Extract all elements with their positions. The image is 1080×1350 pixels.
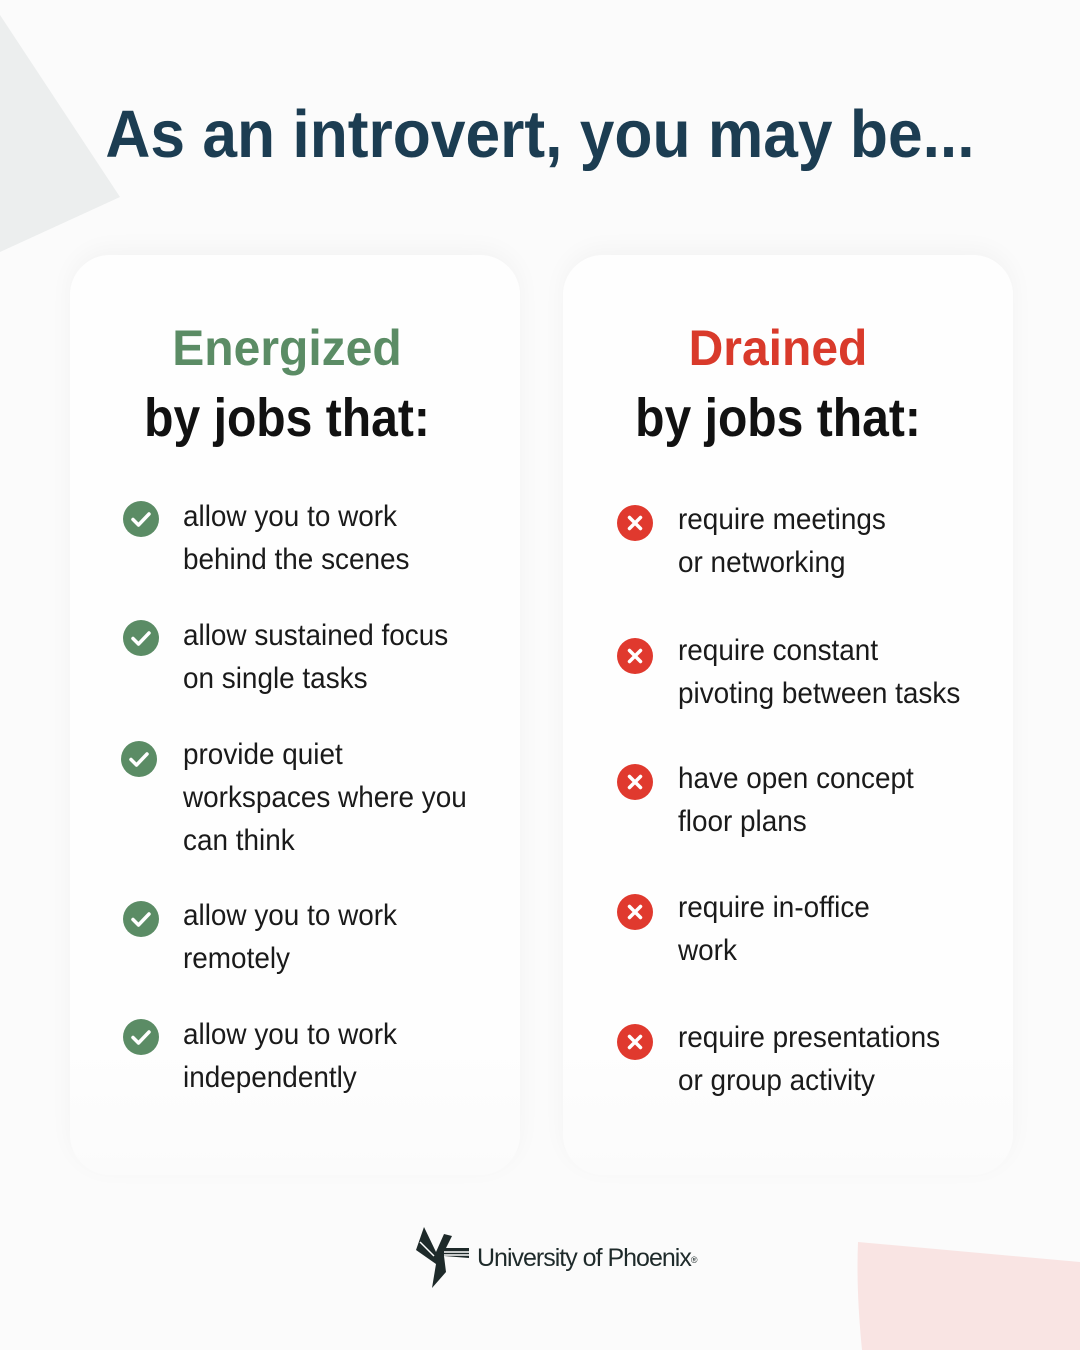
icon: check (123, 901, 159, 937)
heading: by jobs that: by jobs that: (144, 388, 430, 448)
list: energized items: on single tasks (183, 662, 368, 695)
list: energized items: independently (183, 1061, 357, 1094)
list: energized items: allow sustained focus (183, 619, 448, 652)
logo: University of Phoenix (416, 1227, 698, 1288)
heading: energized: Energized (172, 320, 402, 376)
list: energized items: behind the scenes (183, 543, 409, 576)
list: energized items: remotely (183, 942, 290, 975)
icon: x (617, 1024, 653, 1060)
icon: x (617, 894, 653, 930)
list: energized items: workspaces where you (183, 781, 467, 814)
list: drained items: have open concept (678, 762, 914, 795)
icon: phoenix (416, 1227, 469, 1288)
list: drained items (617, 503, 960, 1097)
list: drained items: or group activity (678, 1064, 875, 1097)
list: energized items: allow you to work (183, 899, 397, 932)
list: drained items: require constant (678, 634, 878, 667)
list: drained items: or networking (678, 546, 845, 579)
list: energized items: can think (183, 824, 295, 857)
list: energized items (121, 500, 467, 1094)
list: drained items: work (678, 934, 737, 967)
title: As an introvert, you may be... (105, 97, 975, 172)
icon: check (123, 1019, 159, 1055)
heading: by jobs that: by jobs that: (635, 388, 921, 448)
list: energized items: allow you to work (183, 1018, 397, 1051)
list: drained items: require presentations (678, 1021, 940, 1054)
list: drained items: floor plans (678, 805, 807, 838)
list: energized items: allow you to work (183, 500, 397, 533)
icon: x (617, 638, 653, 674)
icon: check (123, 620, 159, 656)
list: drained items: require in-office (678, 891, 870, 924)
panel: drained (563, 255, 1013, 1175)
list: energized items: provide quiet (183, 738, 343, 771)
decorative shape bottom-right (858, 1242, 1080, 1350)
heading: drained: Drained (689, 320, 867, 376)
panel: energized (70, 255, 520, 1175)
icon: x (617, 505, 653, 541)
decorative shape top-left (0, 16, 120, 252)
icon: x (617, 764, 653, 800)
icon: check (123, 501, 159, 537)
list: drained items: pivoting between tasks (678, 677, 960, 710)
logo text: University of Phoenix® (477, 1244, 696, 1272)
icon: check (121, 741, 157, 777)
list: drained items: require meetings (678, 503, 886, 536)
